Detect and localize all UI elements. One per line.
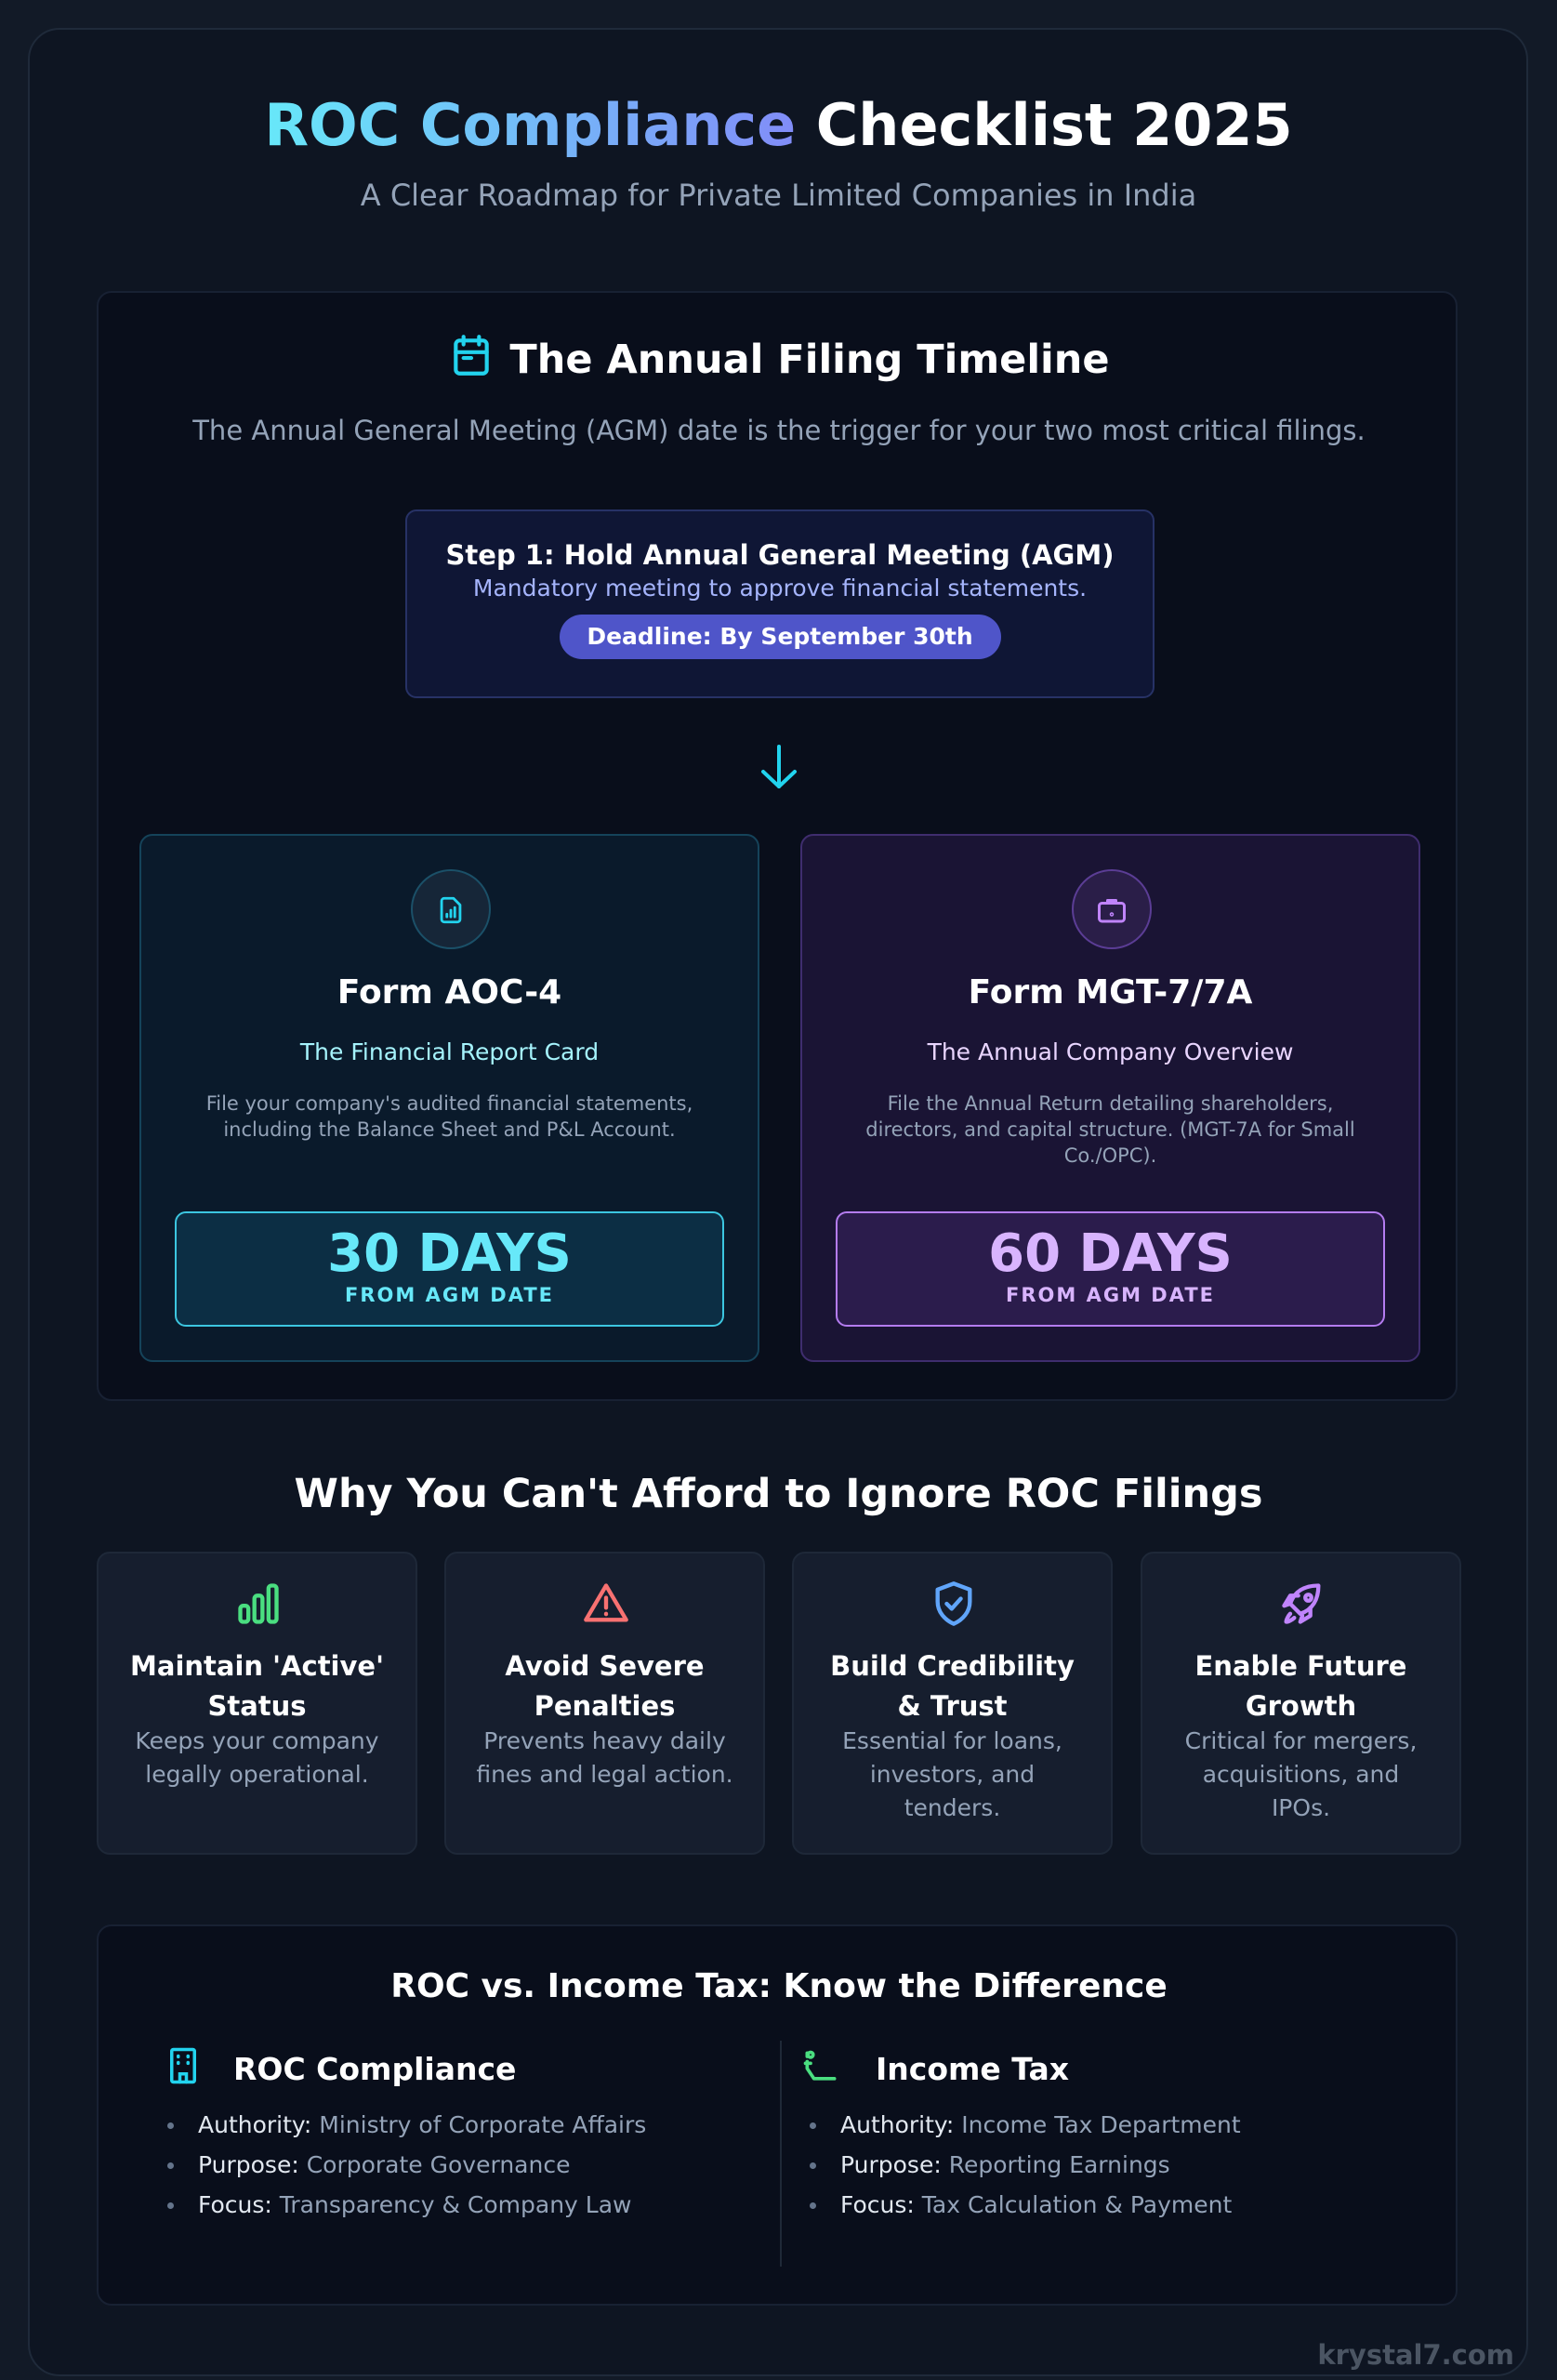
watermark: krystal7.com [1317,2339,1514,2371]
timeline description: The Annual General Meeting (AGM) date is the trigger for your two most critical filings. [192,415,1366,446]
column: Income Tax: Focus: Tax Calculation & Payment [840,2191,1232,2218]
column: ROC: Purpose: Corporate Governance [198,2151,570,2178]
icon: building [170,2047,196,2084]
column: ROC [167,2047,646,2218]
icon: report [411,869,491,949]
benefit: growth: Enable Future [1195,1650,1406,1682]
60 days box: FROM AGM DATE [1006,1284,1215,1306]
benefit: growth: Critical for mergers, [1185,1727,1417,1754]
column: ROC: Focus: Transparency & Company Law [198,2191,632,2218]
card: MGT-7: File the Annual Return detailing shareholders, directors, and capital structure. (MGT-7A for Small Co./OPC). [865,1092,1355,1167]
deadline pill: Deadline: By September 30th [587,623,973,650]
icon: rocket [1282,1583,1320,1624]
card: AOC-4 [139,834,759,1362]
column: Income Tax [803,2051,1241,2218]
deadline pill [560,615,1000,659]
column: Income Tax: Authority: Income Tax Department [840,2111,1241,2138]
timeline heading: The Annual Filing Timeline [509,337,1110,383]
benefit: growth: Growth [1246,1690,1356,1722]
icon: calendar [454,335,489,376]
benefit: active status: legally operational. [145,1761,369,1788]
card: AOC-4: File your company's audited financial statements, including the Balance Sheet and P&L Account. [206,1092,693,1141]
30 days box: 30 DAYS [327,1223,572,1284]
icon: shield [935,1581,972,1626]
card: AOC-4: The Financial Report Card [300,1038,599,1065]
card: MGT-7: Form MGT-7/7A [969,973,1252,1012]
divider [780,2041,782,2267]
benefit: credibility: Build Credibility [830,1650,1075,1682]
panel: timeline [97,291,1458,1401]
benefit: credibility [792,1552,1113,1855]
column: Income Tax: Income Tax [876,2051,1069,2087]
benefit: growth [1141,1552,1461,1855]
subtitle: A Clear Roadmap for Private Limited Companies in India [361,178,1196,213]
panel: ROC vs Income Tax [97,1924,1458,2306]
card: MGT-7: The Annual Company Overview [928,1038,1293,1065]
60 days box [836,1211,1385,1327]
60 days box: 60 DAYS [988,1223,1233,1284]
icon: hand coins [803,2051,837,2081]
column: ROC: ROC Compliance [233,2051,516,2087]
heading: why: Why You Can't Afford to Ignore ROC Filings [295,1471,1262,1517]
benefit: penalties: Avoid Severe [505,1650,705,1682]
benefit: active status: Status [207,1690,307,1722]
card: MGT-7 [800,834,1420,1362]
30 days box [175,1211,724,1327]
benefit: credibility: tenders. [904,1794,1000,1821]
step 1 box: Mandatory meeting to approve financial statements. [473,575,1087,602]
benefit: growth: acquisitions, and [1203,1761,1399,1788]
step 1 box: Step 1: Hold Annual General Meeting (AGM) [446,539,1114,571]
step 1 box [405,509,1155,698]
benefit: penalties: Penalties [534,1690,675,1722]
benefit: credibility: investors, and [870,1761,1035,1788]
benefit: credibility: & Trust [897,1690,1008,1722]
benefit: penalties: Prevents heavy daily [483,1727,726,1754]
column: ROC: Authority: Ministry of Corporate Affairs [198,2111,646,2138]
benefit: penalties [444,1552,765,1855]
title: ROC Compliance Checklist 2025 [264,91,1293,159]
benefit: active status: Maintain 'Active' [130,1650,384,1682]
icon: warning [584,1583,628,1621]
icon: briefcase [1072,869,1152,949]
comparison heading: ROC vs. Income Tax: Know the Difference [390,1967,1168,2005]
benefit: active status [97,1552,417,1855]
card: AOC-4: Form AOC-4 [337,973,561,1012]
column: Income Tax: Purpose: Reporting Earnings [840,2151,1170,2178]
arrow down [760,745,798,788]
icon: bar chart [238,1583,279,1624]
benefit: credibility: Essential for loans, [842,1727,1062,1754]
benefit: active status: Keeps your company [135,1727,379,1754]
30 days box: FROM AGM DATE [345,1284,554,1306]
benefit: growth: IPOs. [1272,1794,1330,1821]
benefit: penalties: fines and legal action. [476,1761,733,1788]
